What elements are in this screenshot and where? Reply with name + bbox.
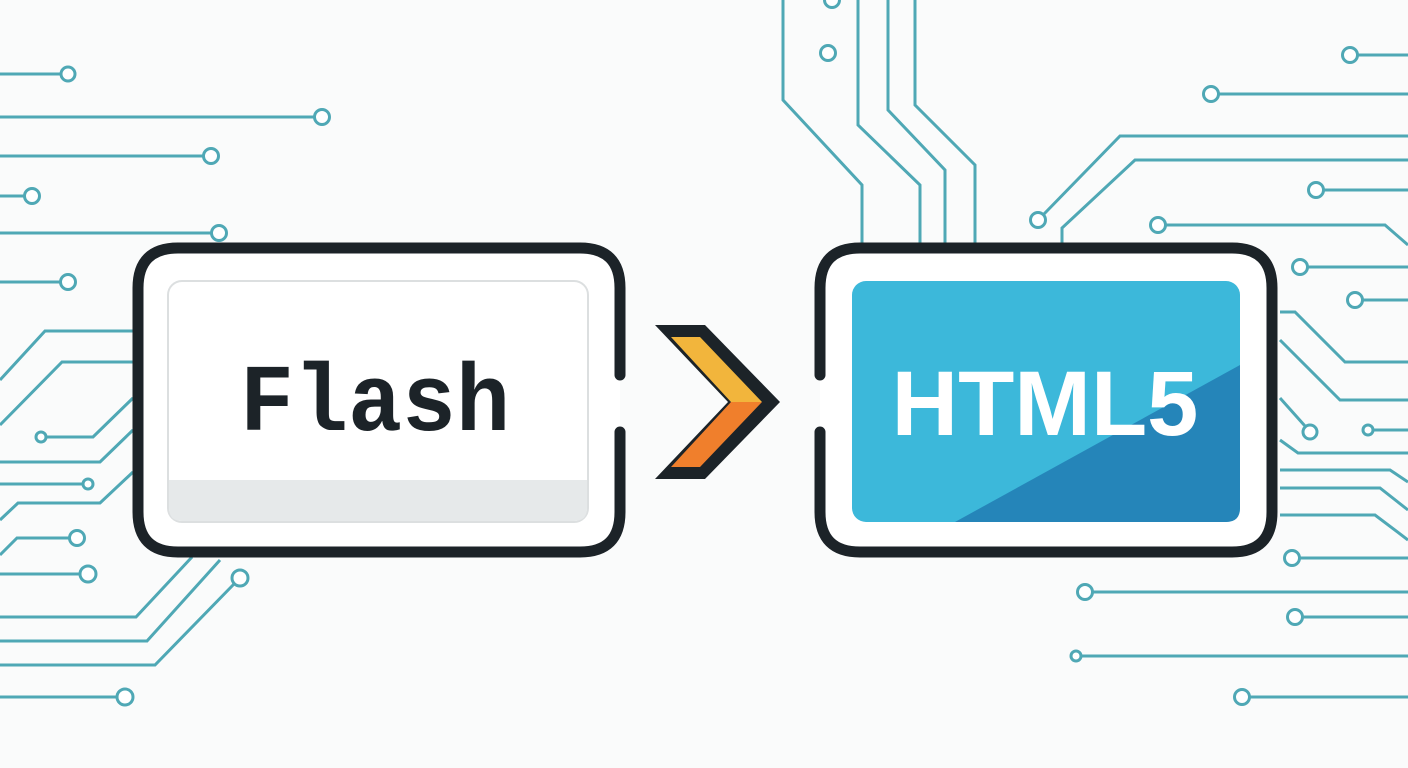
text: HTML5: HTML5	[892, 353, 1198, 455]
icon: arrow chevron	[655, 325, 780, 479]
panel: Flash	[138, 248, 620, 552]
circuit lines top center	[783, 0, 975, 243]
panel: HTML5	[820, 248, 1272, 552]
circuit lines left	[0, 67, 330, 705]
text: Flash: Flash	[240, 350, 510, 459]
circuit lines right	[1030, 48, 1408, 704]
